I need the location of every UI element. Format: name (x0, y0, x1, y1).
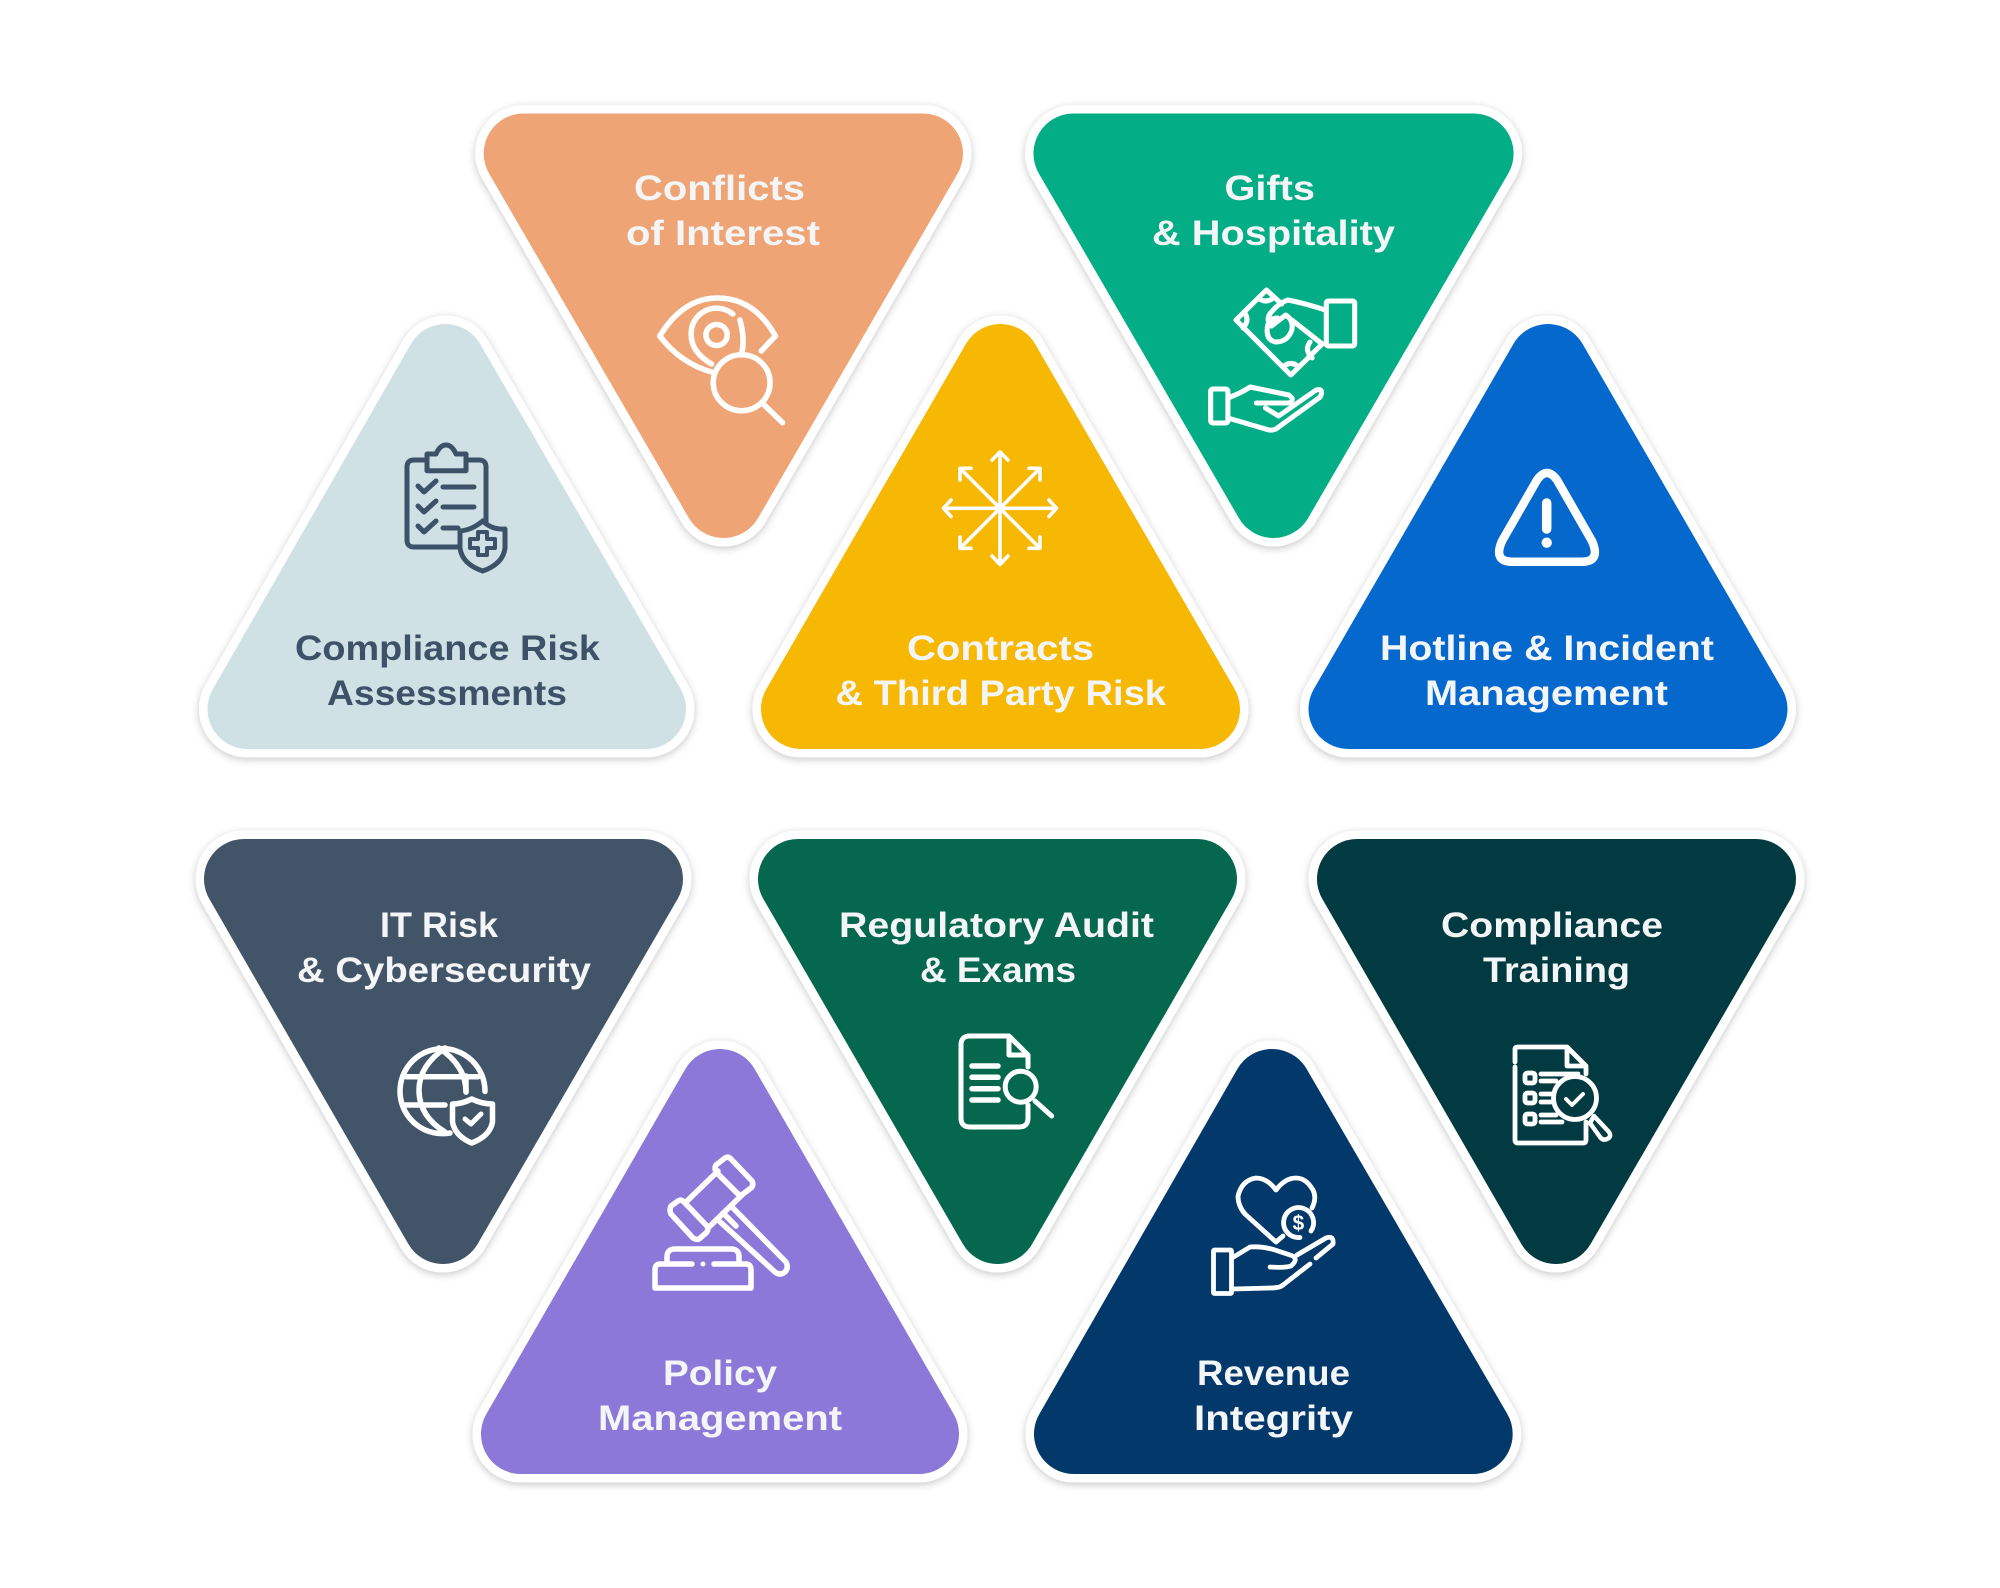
heading: Gifts & Hospitality: & Hospitality (1152, 214, 1396, 253)
heading: Revenue Integrity (1194, 1354, 1354, 1438)
panel: Policy Management (521, 1089, 919, 1438)
heading: Contracts & Third Party Risk (836, 629, 1167, 713)
icon: document with magnifier (961, 1036, 1052, 1127)
heading: Regulatory Audit & Exams: & Exams (920, 951, 1076, 990)
panel: Hotline & Incident Management (1348, 364, 1748, 713)
heading: Regulatory Audit & Exams: Regulatory Audit (839, 906, 1154, 945)
heading: IT Risk & Cybersecurity (297, 906, 592, 990)
panel: Gifts & Hospitality (1074, 154, 1474, 498)
heading: Policy Management: Management (598, 1399, 842, 1438)
heading: Contracts & Third Party Risk: Contracts (907, 629, 1094, 668)
icon: arrows radiating outward (944, 452, 1056, 564)
heading: Compliance Risk Assessments: Assessments (327, 674, 567, 713)
heading: IT Risk & Cybersecurity: IT Risk (380, 906, 499, 945)
icon: globe with shield (400, 1048, 492, 1143)
heading: Contracts & Third Party Risk: & Third Party Risk (836, 674, 1167, 713)
icon: warning triangle (1499, 473, 1595, 562)
heading: Gifts & Hospitality: Gifts (1224, 169, 1315, 208)
heading: Compliance Risk Assessments (295, 629, 601, 713)
panel: Regulatory Audit & Exams (798, 879, 1197, 1224)
icon: clipboard with shield (407, 445, 505, 571)
panel: Conflicts of Interest (524, 154, 923, 498)
icon: hand holding heart and coin (1214, 1178, 1333, 1294)
heading: Policy Management (598, 1354, 842, 1438)
icon: judge gavel (655, 1157, 787, 1288)
panel: Contracts & Third Party Risk (801, 364, 1200, 713)
heading: Conflicts of Interest (626, 169, 820, 253)
heading: IT Risk & Cybersecurity: & Cybersecurity (297, 951, 592, 990)
heading: Compliance Risk Assessments: Compliance Risk (295, 629, 601, 668)
panel: Revenue Integrity (1074, 1089, 1473, 1438)
heading: Revenue Integrity: Integrity (1194, 1399, 1354, 1438)
heading: Revenue Integrity: Revenue (1197, 1354, 1350, 1393)
icon: checklist document with magnifier (1515, 1047, 1610, 1143)
heading: Conflicts of Interest: Conflicts (634, 169, 805, 208)
heading: Compliance Training: Compliance (1441, 906, 1663, 945)
icon: hands exchanging money (1211, 290, 1355, 430)
heading: Compliance Training: Training (1483, 951, 1630, 990)
heading: Gifts & Hospitality (1152, 169, 1396, 253)
heading: Hotline & Incident Management: Management (1425, 674, 1668, 713)
panel: Compliance Risk Assessments (248, 364, 646, 713)
icon: eye with magnifier (660, 298, 783, 423)
panel: IT Risk & Cybersecurity (244, 879, 643, 1224)
heading: Hotline & Incident Management: Hotline & Incident (1380, 629, 1714, 668)
panel: Compliance Training (1357, 879, 1756, 1224)
heading: Compliance Training (1441, 906, 1663, 990)
heading: Conflicts of Interest: of Interest (626, 214, 820, 253)
icon label: dollar sign: $ (1292, 1212, 1304, 1235)
heading: Regulatory Audit & Exams (839, 906, 1154, 990)
heading: Policy Management: Policy (663, 1354, 778, 1393)
heading: Hotline & Incident Management (1380, 629, 1714, 713)
